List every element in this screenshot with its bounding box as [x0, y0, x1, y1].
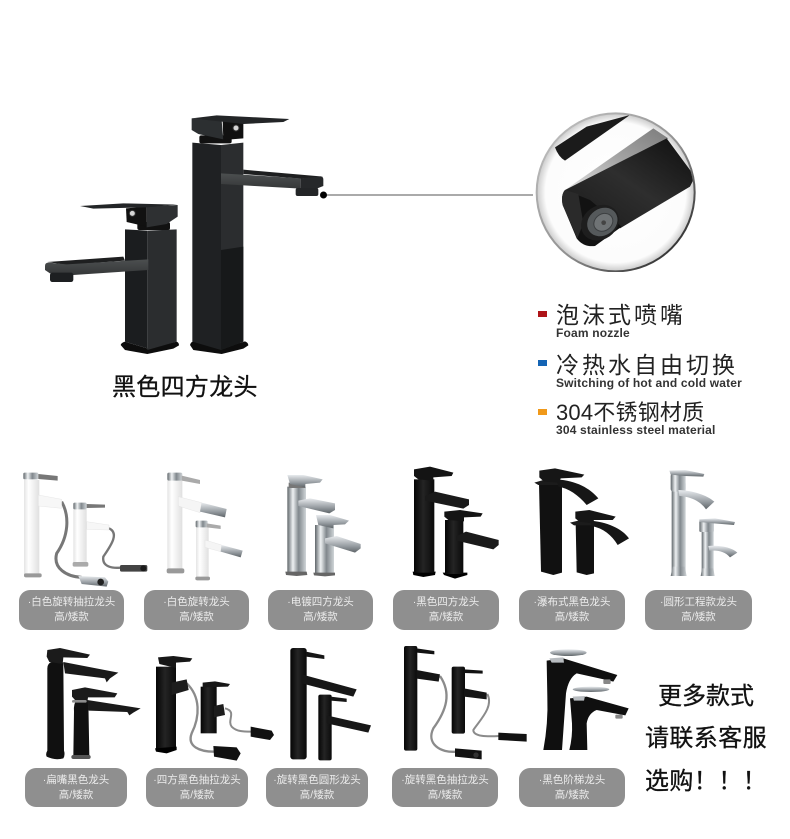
tall black square faucet	[190, 115, 323, 354]
feature subtitle: foam nozzle: Foam nozzle	[556, 326, 630, 340]
text line 1: 更多款式	[658, 683, 754, 710]
product card: flat spout black faucet	[25, 648, 140, 807]
feature marker: orange	[538, 409, 547, 415]
product card: stepped black faucet	[519, 650, 629, 807]
product card: white swivel pull-out faucet	[19, 472, 148, 630]
label pill: 高/矮款	[303, 611, 338, 623]
short black square faucet	[45, 203, 179, 354]
label pill: 高/矮款	[428, 789, 462, 801]
label pill: ·四方黑色抽拉龙头	[153, 774, 241, 786]
label pill: 高/矮款	[300, 789, 334, 801]
label pill: ·扁嘴黑色龙头	[43, 774, 109, 786]
feature subtitle: stainless steel: 304 stainless steel material	[556, 423, 716, 437]
label pill: 高/矮款	[59, 789, 93, 801]
label pill	[519, 768, 625, 807]
label pill: 高/矮款	[555, 611, 589, 623]
label pill	[393, 590, 499, 630]
icon: black swivel pull-out faucets	[404, 646, 527, 760]
label pill: ·黑色阶梯龙头	[539, 774, 605, 786]
label pill: ·白色旋转龙头	[163, 596, 230, 608]
label pill: ·电镀四方龙头	[287, 596, 354, 608]
label pill	[146, 768, 248, 807]
icon: white pull-out faucets	[23, 472, 148, 587]
callout connector line and dot	[320, 192, 533, 198]
icon: black waterfall faucets	[534, 468, 629, 575]
label pill	[268, 590, 373, 630]
product card: round chrome faucet	[645, 470, 752, 630]
label pill: 高/矮款	[54, 611, 89, 623]
feature heading: hot and cold switching: 冷热水自由切换	[556, 352, 738, 378]
label pill: ·瀑布式黑色龙头	[534, 596, 610, 608]
label pill: ·圆形工程款龙头	[660, 596, 737, 608]
icon: square black pull-out faucets	[155, 656, 274, 761]
product card: black waterfall faucet	[519, 468, 629, 630]
icon: round chrome faucets	[670, 470, 738, 576]
label pill: 高/矮款	[180, 789, 214, 801]
label pill	[519, 590, 625, 630]
label pill: 高/矮款	[429, 611, 463, 623]
main product photo: tall and short black square faucets	[45, 115, 324, 354]
feature marker: red	[538, 311, 547, 317]
icon: chrome square faucets	[285, 475, 361, 576]
text line 2: 请联系客服	[645, 725, 767, 752]
label pill	[144, 590, 249, 630]
label pill: 高/矮款	[179, 611, 214, 623]
icon: round black swivel faucets	[290, 648, 371, 760]
icon: black square faucets	[412, 466, 499, 579]
icon: white swivel faucets	[166, 472, 243, 580]
feature marker: blue	[538, 360, 547, 366]
label pill	[25, 768, 127, 807]
label pill	[19, 590, 124, 630]
feature subtitle: hot and cold switching: Switching of hot and cold water	[556, 376, 742, 390]
label pill: ·旋转黑色圆形龙头	[273, 774, 361, 786]
feature heading: foam nozzle: 泡沫式喷嘴	[556, 302, 686, 328]
label pill: ·黑色四方龙头	[413, 596, 479, 608]
product name caption: 黑色四方龙头	[112, 374, 258, 401]
feature heading: stainless steel: 304不锈钢材质	[556, 400, 704, 425]
product card: black square faucet	[393, 466, 499, 630]
product card: square black pull-out faucet	[146, 656, 274, 807]
call to action text	[645, 683, 767, 795]
text line 3: 选购！！！	[645, 768, 767, 795]
feature list	[538, 302, 742, 437]
icon: flat spout black faucets	[46, 648, 140, 760]
product card: round black swivel faucet	[266, 648, 371, 807]
label pill: 高/矮款	[555, 789, 589, 801]
label pill	[392, 768, 498, 807]
label pill: ·旋转黑色抽拉龙头	[401, 774, 489, 786]
icon: stepped black and chrome faucets	[543, 650, 629, 750]
label pill	[266, 768, 368, 807]
product card: chrome square faucet	[268, 475, 373, 630]
label pill	[645, 590, 752, 630]
circular detail: foam nozzle close-up	[536, 112, 696, 272]
label pill: ·白色旋转抽拉龙头	[28, 596, 115, 608]
label pill: 高/矮款	[681, 611, 716, 623]
product card: black swivel pull-out faucet	[392, 646, 527, 807]
product card: white swivel faucet	[144, 472, 249, 630]
